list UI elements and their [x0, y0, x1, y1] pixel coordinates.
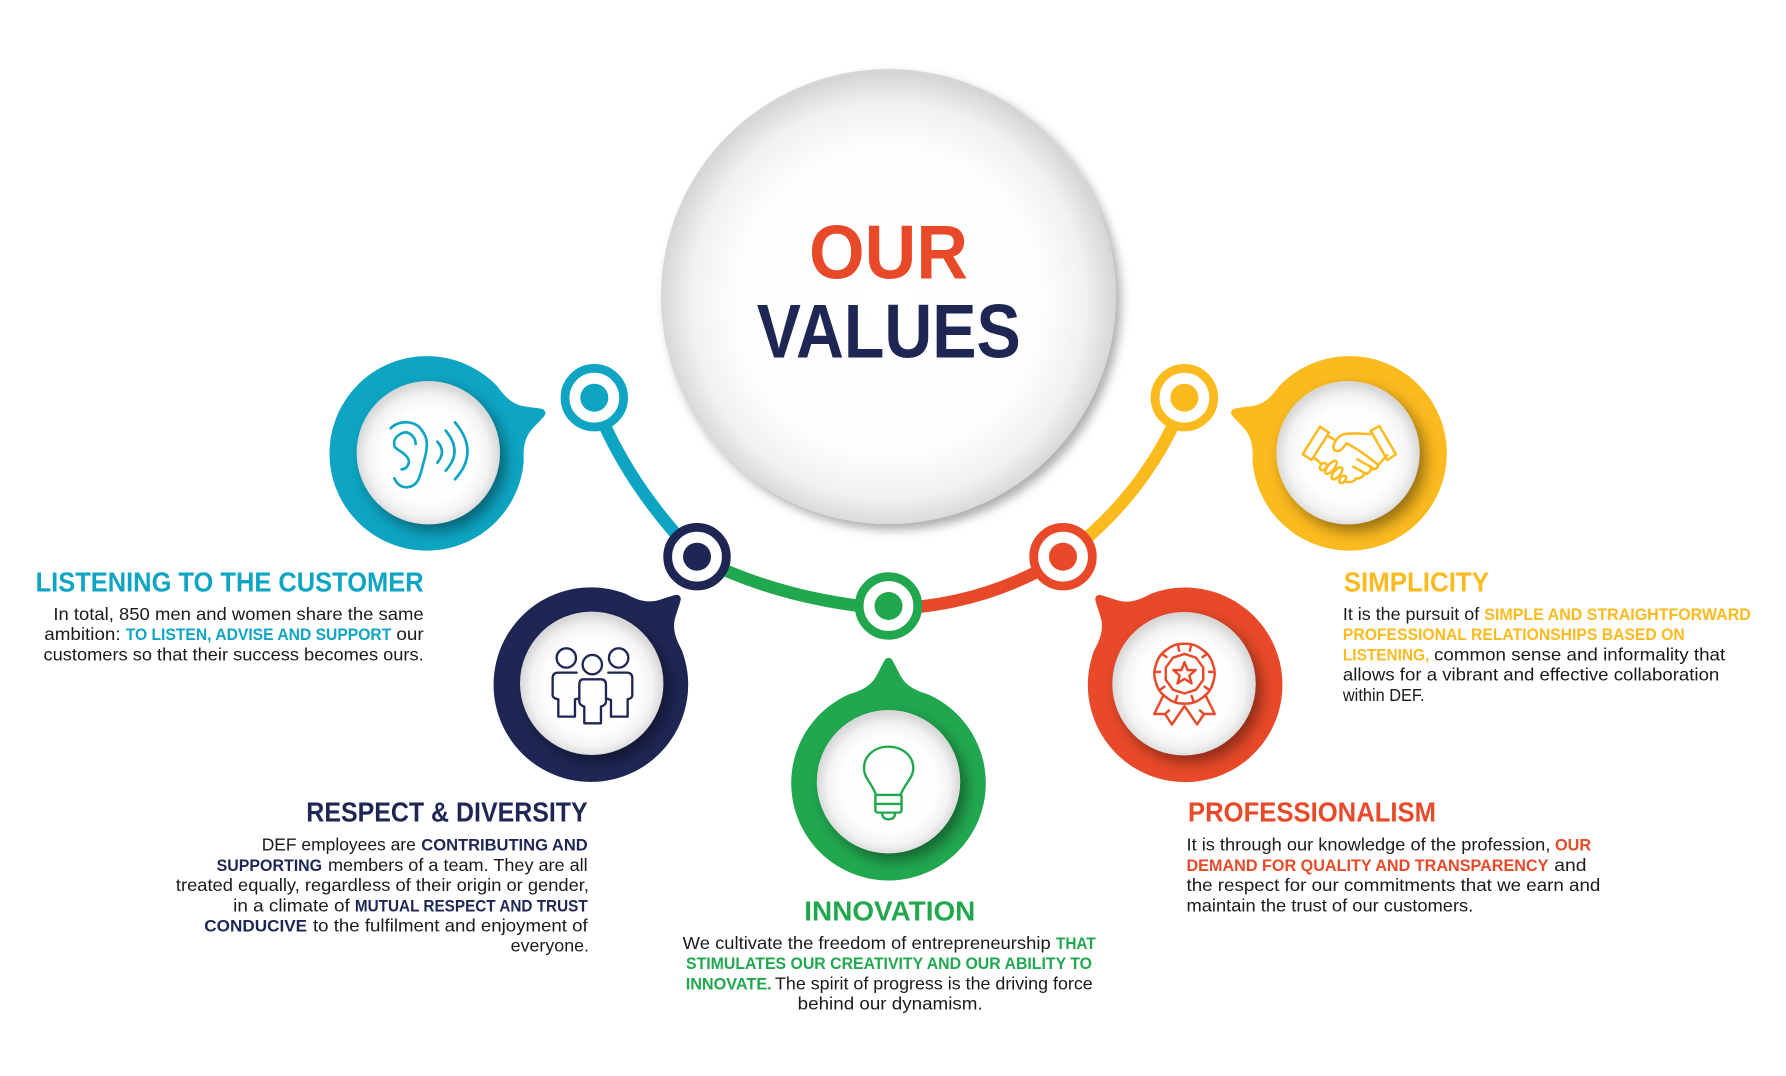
body text — [44, 604, 424, 664]
node: professionalism — [1034, 527, 1092, 586]
icon: ear with sound waves — [391, 422, 467, 487]
body text: to the fulfilment and enjoyment of — [313, 916, 588, 936]
bubble: green — [791, 658, 986, 880]
heading: PROFESSIONALISM — [1188, 797, 1436, 828]
title: our values: VALUES — [757, 290, 1021, 375]
body text: treated equally, regardless of their origin or gender, — [176, 875, 589, 895]
body text: It is the pursuit of — [1343, 604, 1479, 624]
heading: SIMPLICITY — [1344, 567, 1489, 598]
disc: white — [817, 710, 960, 853]
body text: MUTUAL RESPECT AND TRUST — [355, 896, 588, 915]
body text: The spirit of progress is the driving force — [775, 973, 1093, 993]
body text: SUPPORTING — [217, 856, 322, 875]
body text: CONDUCIVE — [204, 916, 307, 936]
disc: white — [1112, 612, 1256, 755]
body text: everyone. — [511, 936, 589, 956]
node: simplicity — [1155, 368, 1214, 427]
body text: in a climate of — [233, 895, 350, 915]
body text: CONTRIBUTING AND — [421, 836, 588, 855]
body text: allows for a vibrant and effective collaboration — [1343, 665, 1719, 685]
body text: LISTENING, — [1343, 645, 1429, 664]
body text: behind our dynamism. — [798, 994, 983, 1014]
body text: In total, 850 men and women share the same — [53, 604, 424, 624]
bubble: navy — [453, 527, 748, 822]
panel: listening to the customer — [36, 320, 577, 664]
disc: white — [1276, 381, 1420, 524]
heading: INNOVATION — [804, 896, 975, 927]
body text: and — [1554, 855, 1586, 875]
node: respect — [668, 527, 726, 586]
title: our values: OUR — [809, 210, 968, 295]
icon: handshake — [1303, 426, 1396, 484]
body text: our — [396, 624, 424, 644]
body text: STIMULATES OUR CREATIVITY AND OUR ABILITY TO — [686, 954, 1092, 973]
body text: It is through our knowledge of the profession, — [1186, 835, 1550, 855]
bubble: red — [1028, 527, 1323, 822]
body text: within DEF. — [1342, 685, 1425, 705]
node: listening — [565, 368, 624, 427]
body text — [1186, 835, 1600, 915]
body text: customers so that their success becomes ours. — [44, 644, 424, 664]
body text: We cultivate the freedom of entrepreneurship — [683, 933, 1051, 953]
panel: professionalism — [1028, 527, 1600, 915]
panel: respect and diversity — [176, 527, 748, 956]
body text: common sense and informality that — [1434, 644, 1725, 664]
body text: PROFESSIONAL RELATIONSHIPS BASED ON — [1343, 625, 1685, 644]
panel: innovation — [683, 658, 1096, 1014]
body text — [1342, 604, 1751, 705]
body text: maintain the trust of our customers. — [1186, 895, 1473, 915]
connector: curved timeline — [600, 415, 1178, 609]
disc: white — [520, 612, 663, 755]
icon: three people — [553, 648, 632, 723]
body text: INNOVATE. — [686, 974, 772, 993]
body text: OUR — [1555, 836, 1591, 855]
panel: simplicity — [1199, 320, 1751, 705]
title: our values — [757, 210, 1021, 375]
body text: the respect for our commitments that we earn and — [1186, 875, 1600, 895]
body text: members of a team. They are all — [328, 855, 588, 875]
body text: THAT — [1056, 934, 1096, 953]
body text — [176, 835, 589, 956]
icon: award rosette — [1154, 644, 1215, 724]
bubble: cyan — [303, 320, 577, 577]
icon: light bulb — [864, 747, 913, 819]
body text — [683, 933, 1096, 1014]
bubble: yellow — [1199, 320, 1474, 578]
disc: white — [357, 381, 500, 524]
central circle — [661, 69, 1116, 524]
heading: RESPECT & DIVERSITY — [306, 797, 588, 828]
body text: SIMPLE AND STRAIGHTFORWARD — [1484, 605, 1751, 624]
heading: LISTENING TO THE CUSTOMER — [36, 567, 424, 598]
body text: ambition: — [44, 624, 121, 644]
body text: TO LISTEN, ADVISE AND SUPPORT — [126, 625, 392, 644]
body text: DEF employees are — [262, 835, 416, 855]
node: innovation — [859, 577, 918, 635]
body text: DEMAND FOR QUALITY AND TRANSPARENCY — [1186, 856, 1549, 875]
